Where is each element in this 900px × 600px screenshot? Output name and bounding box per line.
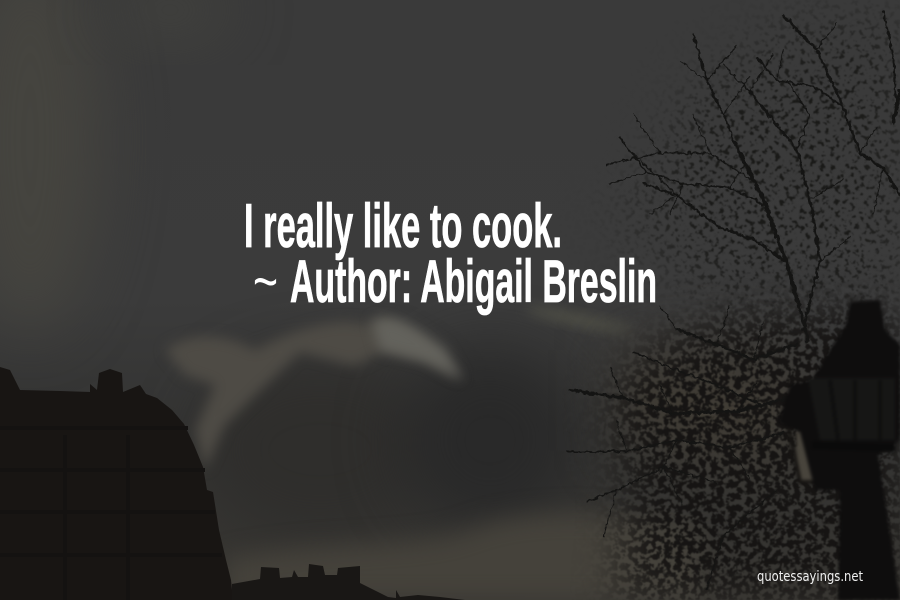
- building: left dome: [0, 367, 233, 600]
- author attribution: ~: [253, 248, 278, 315]
- author attribution: [253, 248, 657, 315]
- street lamp: [778, 300, 900, 600]
- tree branches: [567, 11, 900, 589]
- building: low rooftops: [232, 564, 465, 600]
- quote text: I really like to cook.: [244, 192, 562, 261]
- watermark: quotessayings.net: [757, 569, 863, 585]
- tree foliage: [610, 20, 900, 600]
